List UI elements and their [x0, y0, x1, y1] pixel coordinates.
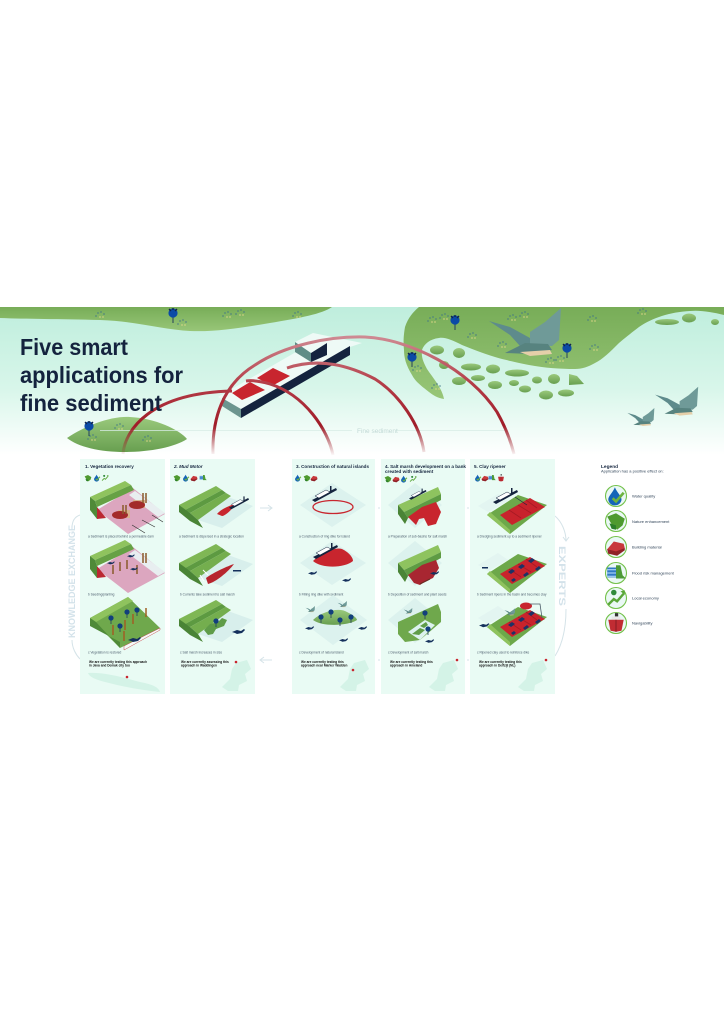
birds	[489, 308, 698, 426]
scene a: sub-basins	[388, 483, 442, 528]
caption c: c Development of natural island	[299, 650, 344, 654]
legend: nature enhancement	[606, 510, 670, 532]
panel: 4 salt marsh development	[381, 459, 466, 694]
scene b: deposition	[388, 541, 442, 586]
hill: lower left island	[67, 417, 187, 452]
legend: water quality	[606, 486, 655, 506]
caption b: b Currents take sediment to salt marsh	[180, 592, 235, 596]
caption a: a Sediment is placed behind a permeable dam	[88, 534, 154, 538]
legend: navigability	[606, 612, 652, 634]
caption a: a Dredging sediment up to a sediment ripener	[477, 534, 543, 538]
scene a: dredging	[478, 488, 547, 534]
effect icons	[295, 475, 317, 482]
note: approach in Waddingen	[181, 664, 217, 668]
scene a: ring dike	[300, 483, 366, 527]
effect icons	[85, 475, 108, 482]
legend: building material	[606, 536, 662, 558]
scene c: salt marsh grows	[179, 600, 253, 642]
panel: 1 vegetation recovery	[80, 459, 165, 694]
note: approach near Marker Wadden	[301, 664, 348, 668]
caption a: a Construction of ring dike for island	[299, 534, 350, 538]
scene c: natural island	[300, 595, 367, 645]
note: We are currently testing this	[301, 660, 344, 664]
note: We are currently testing this	[390, 660, 433, 664]
caption c: c Development of salt marsh	[388, 650, 429, 654]
flow: knowledge exchange and experts loop: EXPERTS	[556, 546, 567, 606]
legend: nature enhancement: Nature enhancement	[632, 519, 670, 524]
heading: 4. Salt marsh development on a bank	[385, 464, 466, 469]
caption c: c Ripened clay used to reinforce dike	[477, 650, 529, 654]
heading: created with sediment	[385, 469, 434, 474]
panel: 2 mud motor	[170, 459, 255, 694]
legend subtitle: Application has a positive effect on:	[601, 468, 664, 474]
salt marsh islets	[430, 314, 719, 400]
heading: 3. Construction of natural islands	[296, 464, 369, 469]
note: approach in Delfzijl (NL)	[479, 664, 515, 668]
map: Netherlands	[340, 660, 369, 691]
note: approach in Ameland	[390, 664, 422, 668]
legend: local economy: Local economy	[632, 596, 659, 600]
scene a: permeable dam	[90, 481, 165, 534]
note: We are currently testing this approach	[89, 660, 147, 664]
scene b: filling	[300, 541, 366, 585]
caption c: c Salt marsh increases in size	[180, 650, 222, 654]
title: fine sediment	[20, 390, 162, 416]
flow: knowledge exchange and experts loop	[67, 505, 569, 663]
hill: top left	[0, 307, 332, 331]
effect icons	[174, 475, 207, 482]
effect icons	[385, 476, 416, 483]
caption a: a Preparation of sub-basins for salt marsh	[388, 534, 447, 538]
legend: water quality: Water quality	[632, 494, 655, 498]
note: We are currently testing this	[479, 660, 522, 664]
effect icons	[475, 474, 504, 482]
background: sky band	[0, 307, 724, 455]
title: applications for	[20, 362, 183, 388]
note: We are currently assessing this	[181, 660, 229, 664]
heading: 1. Vegetation recovery	[85, 464, 134, 469]
scene b: ripening	[478, 553, 547, 593]
heading: 2. Mud Motor	[173, 464, 203, 469]
caption b: b Deposition of sediment and plant seeds	[388, 592, 447, 596]
legend: flood risk management: Flood risk management	[632, 570, 675, 576]
scene c: ripened clay	[478, 602, 547, 646]
scene b: seeding	[90, 540, 165, 593]
legend	[601, 464, 675, 634]
scene c: vegetation	[90, 597, 160, 650]
legend: flood risk management	[606, 562, 675, 584]
title: Five smart	[20, 334, 128, 360]
note: in Java and Demak city too	[89, 664, 130, 668]
legend: navigability: Navigability	[632, 620, 652, 626]
scene b: currents	[179, 544, 253, 586]
caption b: b Filling ring dike with sediment	[299, 592, 343, 596]
caption b: b Sediment ripens in the basin and becomes clay	[477, 592, 547, 596]
map: Java	[88, 673, 160, 692]
panel: 5 clay ripener	[470, 459, 555, 694]
map: Netherlands	[429, 659, 458, 691]
heading: 5. Clay ripener	[474, 464, 506, 469]
scene a: strategic location	[179, 486, 253, 528]
scene c: salt marsh	[388, 598, 442, 643]
legend: building material: Building material	[632, 544, 662, 550]
barge with sediment	[218, 333, 362, 418]
map: Netherlands	[518, 659, 547, 691]
sediment arcs to the five applications	[123, 337, 514, 455]
hill: upper right salt marsh	[404, 307, 724, 399]
panel: 3 construction of natural islands	[292, 459, 375, 694]
legend: local economy	[606, 588, 659, 608]
map: Netherlands	[222, 660, 251, 691]
flow: knowledge exchange and experts loop: KNOWLEDGE EXCHANGE	[67, 525, 78, 638]
caption b: b Seeding/planting	[88, 592, 115, 596]
fine sediment label: Fine sediment	[357, 428, 398, 435]
title	[20, 334, 183, 416]
caption a: a Sediment is dispersed in a strategic location	[179, 534, 244, 538]
legend heading: Legend	[601, 464, 618, 470]
caption c: c Vegetation is restored	[88, 650, 122, 654]
